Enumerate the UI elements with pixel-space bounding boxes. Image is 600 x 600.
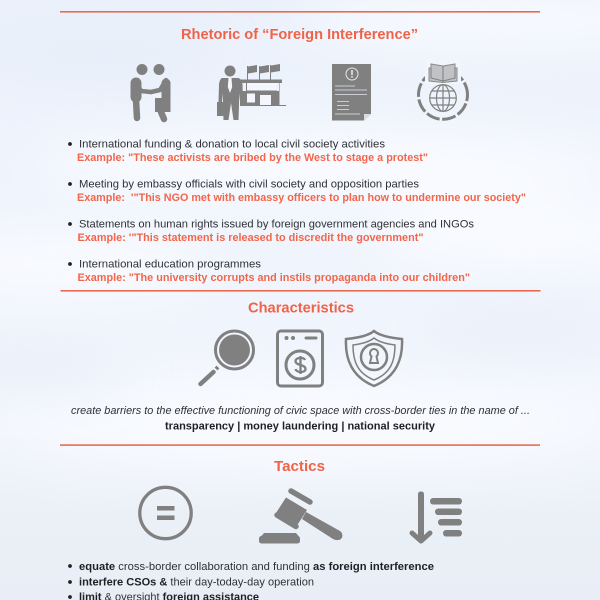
heading: Tactics: Tactics	[274, 458, 325, 475]
icon: equal sign in circle	[140, 487, 191, 539]
bullet list: rhetoric: Statements on human rights issued by foreign government agencies and INGOs	[79, 218, 474, 230]
icon: magnifying glass	[200, 331, 254, 384]
caption: characteristics: create barriers to the effective functioning of civic space with cross-border ties in the name of ...	[71, 405, 530, 417]
bullet list: rhetoric	[68, 138, 526, 284]
bullet list: rhetoric: Meeting by embassy officials with civil society and opposition parties	[79, 178, 420, 190]
bullet list: tactics	[68, 561, 434, 600]
icon: warning document	[332, 64, 371, 120]
bullet list: rhetoric: Example: "These activists are bribed by the West to stage a protest"	[77, 152, 428, 164]
bullet list: tactics: interfere CSOs & their day-today-day operation	[79, 576, 314, 588]
icon: security shield	[346, 331, 402, 386]
icon: globe and book	[412, 60, 474, 126]
divider: top	[60, 11, 540, 13]
icon: gavel	[259, 491, 342, 544]
icon: descending sort arrow	[412, 492, 462, 541]
heading: Characteristics: Characteristics	[248, 300, 354, 316]
bullet list: rhetoric: Example: '"This NGO met with embassy officers to plan how to undermine our society"	[77, 192, 526, 204]
bullet list: rhetoric: International education programmes	[79, 258, 262, 270]
icon: official and embassy building	[217, 64, 286, 120]
divider: tactics	[60, 444, 540, 446]
title: Rhetoric of Foreign Interference: Rhetoric of “Foreign Interference”	[181, 26, 418, 43]
caption: characteristics	[71, 405, 530, 432]
bullet list: rhetoric: Example: "The university corrupts and instils propaganda into our children"	[78, 272, 470, 284]
bullet list: rhetoric: International funding & donation to local civil society activities	[79, 138, 386, 150]
bullet list: tactics: equate cross-border collaboration and funding as foreign interference	[79, 561, 434, 573]
divider: characteristics	[60, 290, 540, 292]
icon: handshake	[136, 64, 170, 119]
icon: money laundering machine	[278, 331, 322, 386]
bullet list: rhetoric: Example: '"This statement is released to discredit the government"	[78, 232, 424, 244]
caption: characteristics: transparency | money laundering | national security	[165, 420, 436, 432]
